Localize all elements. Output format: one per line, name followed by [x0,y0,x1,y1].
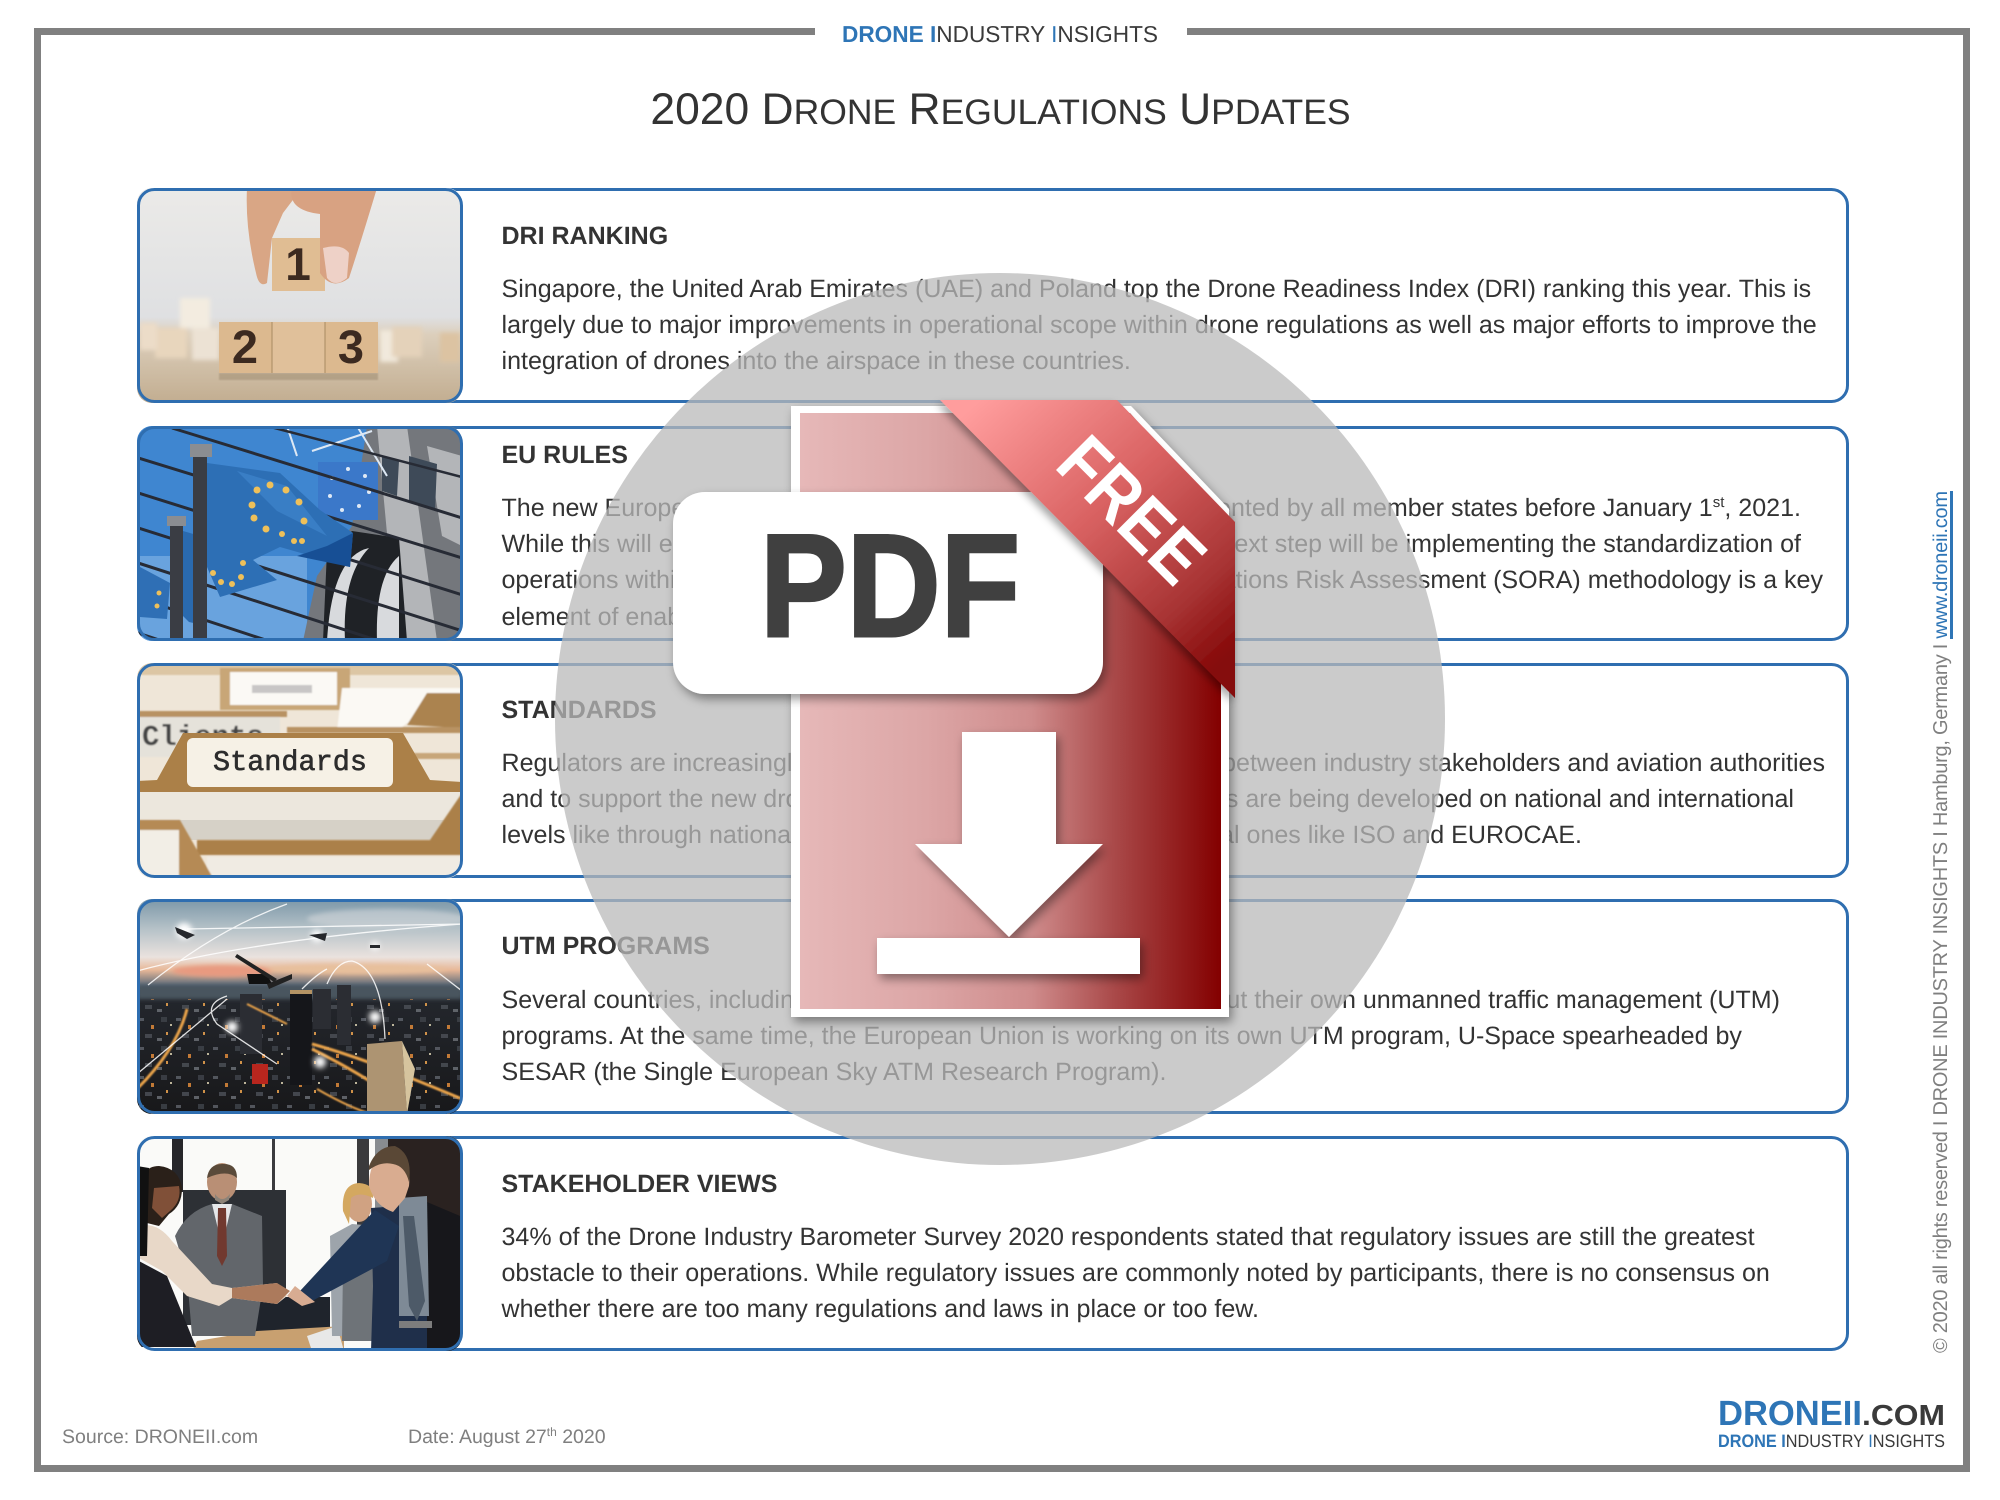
heading: UTM PROGRAMS [502,932,710,960]
image: numbered wooden blocks: 1 [285,238,311,290]
body text: st [1713,494,1725,511]
date note: th [547,1425,557,1439]
logo: droneii.com: DRONEII [1718,1394,1862,1433]
logo: droneii.com: DRONE INDUSTRY INSIGHTS [1718,1431,1945,1451]
image: EU flags [137,426,462,641]
body text: While this will establish a common set of rules in the [502,530,1079,558]
body text: Several countries, including the United States, China and [502,986,1135,1014]
body text: and to support the new drone rules, many standards [502,785,1081,813]
body text: obstacle to their operations. While regulatory issues are commonly noted by participants, there is no consensus on [502,1259,1770,1287]
heading: STAKEHOLDER VIEWS [502,1170,777,1198]
free PDF download overlay [555,273,1445,1165]
body text: , 2021. [1724,494,1801,522]
logo: droneii.com [1718,1394,1945,1451]
body text [500,1223,1770,1323]
body text: Operations Risk Assessment (SORA) methodology is a key [1166,566,1823,594]
document red fill [800,413,1221,1009]
body text: integration of drones into the airspace in these countries. [502,347,1131,375]
FREE ribbon: FREE [1042,420,1222,600]
download arrow [877,732,1140,974]
image: business handshake [137,1136,462,1351]
heading: EU RULES [502,441,628,469]
heading: STANDARDS [502,696,657,724]
body text: element of enabling harmonized operations. [502,603,989,631]
image: standards file folder: Clients [142,721,264,754]
vertical copyright text: © 2020 all rights reserved I DRONE INDUSTRY INSIGHTS I Hamburg, Germany I www.droneii.com [1930,491,1952,1353]
header brand: DRONE INDUSTRY INSIGHTS [842,21,1158,47]
image: standards file folder: Standards [213,746,367,779]
image: numbered wooden blocks: 3 [338,320,364,373]
PDF label: PDF [760,504,1020,667]
body text: implemented by all member states before January 1 [1136,494,1713,522]
body text: Singapore, the United Arab Emirates (UAE) and Poland top the Drone Readiness Index (DRI) ranking this year. This is [502,275,1811,303]
body text: ANSI and international ones like ISO and EUROCAE. [989,821,1582,849]
image: numbered wooden blocks [137,188,462,403]
body text [502,986,1780,1086]
body text: Japan, are rolling out their own unmanned traffic management (UTM) [1013,986,1780,1014]
title: 2020 DRONE REGULATIONS UPDATES [650,85,1351,134]
body text: whether there are too many regulations and laws in place or too few. [500,1295,1259,1323]
panel: standards [137,663,1848,878]
body text: largely due to major improvements in operational scope within drone regulations as well as major efforts to improve the [502,311,1817,339]
image: numbered wooden blocks: 2 [232,320,258,373]
body text [502,494,1823,631]
body text: and guidelines are being developed on national and international [1077,785,1794,813]
date note: 2020 [557,1426,606,1448]
panel: DRI ranking [137,188,1848,403]
body text: and dialogue between industry stakeholders and aviation authorities [1072,749,1825,777]
body text: levels like through national bodies such as [502,821,971,849]
logo: droneii.com: .COM [1862,1400,1945,1432]
document sheet [791,406,1229,1017]
body text: Regulators are increasingly looking for cooperation [502,749,1065,777]
overlay circle [555,273,1445,1165]
panel: EU rules [137,426,1849,641]
body text: The new European drone regulations are set to be [502,494,1060,522]
panel: stakeholder views [137,1136,1848,1351]
panel: UTM programs [137,897,1848,1114]
body text [502,749,1825,849]
body text: operations within Europe. The use of the Specific [502,566,1045,594]
heading: DRI RANKING [502,222,668,250]
PDF label [673,492,1103,694]
body text: SESAR (the Single European Sky ATM Research Program). [502,1058,1166,1086]
date note: Date: August 27 [408,1426,547,1448]
body text: 34% of the Drone Industry Barometer Survey 2020 respondents stated that regulatory issues are still the greatest [502,1223,1755,1251]
body text [502,275,1817,375]
body text: programs. At the same time, the European Union is working on its own UTM program, U-Space spearheaded by [502,1022,1742,1050]
source note: Source: DRONEII.com [62,1426,258,1448]
body text: EU, the next step will be implementing the standardization of [1130,530,1801,558]
FREE ribbon [940,400,1235,698]
image: standards file folder [137,663,462,878]
image: drones over city at dusk [137,897,467,1114]
